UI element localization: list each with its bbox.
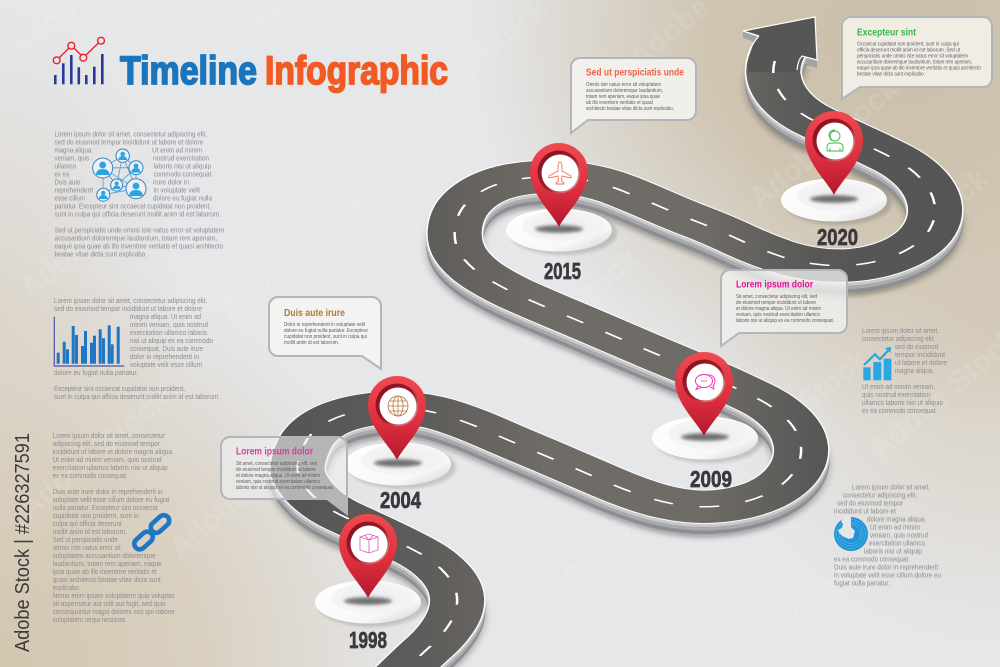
text block: right middle: Ut enim ad minim veniam,: [862, 382, 935, 391]
text block: lower right: incididunt ut labore et: [834, 506, 897, 516]
callout: Lorem ipsum dolor (left): et dolore magna aliqua. Ut enim ad minim: [236, 473, 320, 479]
text block: top left: reprehenderit: [54, 186, 94, 194]
text block: top left: commodo consequat.: [154, 170, 213, 178]
text block: top left: Sed ut perspiciatis unde omnis iste natus error sit voluptatem: [54, 226, 224, 234]
callout: Duis aute irure: mollit anim id est laborum.: [284, 340, 339, 346]
callout: Excepteur sint: Occaecat cupidatat non proident, sunt in culpa qui: [857, 42, 959, 48]
callout: Excepteur sint: eaque ipsa quae ab illo inventore veritatis et quasi architecto: [857, 66, 981, 72]
callout: Duis aute irure: [269, 297, 381, 369]
text block: lower right: sed do eiusmod tempor: [837, 498, 903, 508]
callout: Lorem ipsum dolor (right): laboris nisi ut aliquip ex ea commodo consequat.: [736, 318, 834, 324]
text block: lower right: laboris nisi ut aliquip: [864, 546, 922, 556]
platform and year: 2004: 2004: [380, 487, 421, 513]
text block: right middle: Lorem ipsum dolor sit amet,: [862, 326, 939, 335]
callout: Lorem ipsum dolor (left): laboris nisi ut aliquip ex ea commodo consequat.: [236, 485, 334, 491]
text block: lower right: exercitation ullamco: [869, 538, 925, 548]
text block: top left: accusantium doloremque laudantium, totam rem aperiam,: [54, 234, 217, 242]
callout: Duis aute irure: dolore eu fugiat nulla pariatur. Excepteur: [284, 328, 368, 334]
text block: right middle: [862, 326, 947, 415]
watermark: Adobe Stock: [163, 422, 325, 565]
text block: top left: magna aliqua.: [54, 146, 93, 154]
text block: bottom left: explicabo.: [53, 583, 81, 592]
title: Timeline: [120, 49, 257, 93]
text block: top left: sunt in culpa qui officia deserunt mollit anim id est laborum.: [54, 210, 221, 218]
callout: Sed ut perspiciatis unde: ab illo inventore veritatis et quasi: [586, 100, 653, 106]
text block: top left: beatae vitae dicta sunt explicabo.: [54, 250, 147, 258]
logo icon: chart: [53, 37, 104, 84]
text block: bottom left: voluptate velit esse cillum dolore eu fugiat: [53, 495, 170, 504]
text block: middle left: nisi ut aliquip ex ea commodo: [130, 336, 213, 345]
text block: bottom left: nulla pariatur. Excepteur sint occaecat: [53, 503, 158, 512]
text block: bottom left: voluptatem sequi nesciunt.: [53, 615, 127, 624]
text block: bottom left: laudantium, totam rem aperiam, eaque: [53, 559, 162, 568]
callout: Lorem ipsum dolor (right): [721, 270, 847, 346]
watermark: Adobe Stock: [13, 382, 175, 525]
text block: middle left: consequat. Duis aute irure: [130, 344, 203, 353]
callout: Sed ut perspiciatis unde: accusantium doloremque laudantium,: [586, 88, 663, 94]
callout: Lorem ipsum dolor (left): Sit amet, consectetur adipiscing elit, sed: [236, 461, 317, 467]
text block: middle left: sed do eiusmod tempor incididunt ut labore et dolore: [54, 304, 202, 313]
watermark: Adobe Stock: [753, 512, 915, 655]
watermark: Adobe Stock: [833, 162, 995, 305]
watermark: Adobe Stock: [483, 242, 645, 385]
text block: bottom left: mollit anim id est laborum.: [53, 527, 127, 536]
text block: top left: eaque ipsa quae ab illo inventore veritatis et quasi architecto: [54, 242, 223, 250]
platform and year: 2020: 2020: [817, 224, 858, 250]
text block: bottom left: [53, 431, 175, 624]
callout: Sed ut perspiciatis unde: [571, 58, 696, 133]
icon: people network: [93, 149, 146, 201]
callout: Duis aute irure: Duis aute irure: [284, 307, 345, 319]
platform and year: 2020: [781, 178, 892, 250]
text block: top left: laboris nisi ut aliquip: [154, 162, 211, 170]
callout: Excepteur sint: [842, 17, 992, 99]
text block: lower right: Duis aute irure dolor in reprehenderit: [834, 562, 939, 572]
text block: middle left: [54, 296, 220, 401]
callout: Excepteur sint: officia deserunt mollit anim id est laborum. Sed ut: [857, 48, 960, 54]
callout: Lorem ipsum dolor (left): do eiusmod tempor incididunt ut labore: [236, 467, 316, 473]
text block: top left: nostrud exercitation: [153, 154, 209, 162]
text block: bottom left: Ut enim ad minim veniam, quis nostrud: [53, 455, 162, 464]
text block: top left: ullamco: [54, 162, 76, 170]
text block: middle left: voluptate velit esse cillum: [130, 360, 202, 369]
text block: middle left: exercitation ullamco laboris: [130, 328, 207, 337]
title: Infographic: [265, 49, 448, 93]
platform and year: 2009: 2009: [690, 466, 732, 492]
text block: top left: in voluptate velit: [154, 186, 201, 194]
callout: Lorem ipsum dolor (left): veniam, quis nostrud exercitation ullamco: [236, 479, 320, 485]
callout: Excepteur sint: perspiciatis unde omnis iste natus error sit voluptatem: [857, 54, 968, 60]
watermark: Adobe Stock: [743, 72, 905, 215]
callout: Duis aute irure: cupidatat non proident, sunt in culpa qui: [284, 334, 367, 340]
text block: lower right: dolore magna aliqua.: [867, 514, 926, 524]
text block: top left: Duis aute: [54, 178, 80, 186]
icon: radial chart: [834, 516, 868, 551]
text block: middle left: Excepteur sint occaecat cupidatat non proident,: [54, 384, 185, 393]
icon: bar chart: [54, 317, 124, 366]
text block: middle left: sunt in culpa qui officia deserunt mollit anim id est laborum.: [54, 392, 220, 401]
platform and year: 1998: 1998: [349, 627, 387, 653]
text block: top left: esse cillum: [54, 194, 85, 202]
callout: Sed ut perspiciatis unde: architecto beatae vitae dicta sunt explicabo.: [586, 106, 674, 112]
text block: bottom left: Sed ut perspiciatis unde: [53, 535, 118, 544]
text block: bottom left: consequuntur magni dolores eos qui ratione: [53, 607, 175, 616]
text block: bottom left: Nemo enim ipsam voluptatem quia voluptas: [53, 591, 175, 600]
icon: growth chart: [863, 347, 891, 380]
icon: chain link: [132, 513, 171, 552]
callout: Excepteur sint: beatae vitae dicta sunt explicabo.: [857, 72, 925, 78]
text block: right middle: ullamco laboris nisi ut aliquip: [862, 398, 943, 407]
pin: 2020 headset person icon: [805, 111, 863, 195]
watermark: Adobe Stock: [523, 472, 685, 615]
text block: lower right: in voluptate velit esse cillum dolore eu: [834, 570, 941, 580]
text block: top left: [54, 130, 224, 258]
pin: 2004 globe icon: [368, 376, 426, 460]
callout: Lorem ipsum dolor (right): Lorem ipsum dolor: [736, 278, 813, 290]
text block: bottom left: cupidatat non proident, sunt in: [53, 511, 139, 520]
callout: Excepteur sint: Excepteur sint: [857, 26, 916, 38]
text block: top left: Lorem ipsum dolor sit amet, consectetur adipiscing elit,: [54, 130, 207, 138]
text block: top left: ex ea: [54, 170, 70, 178]
platform and year: 2015: 2015: [544, 258, 581, 284]
text block: top left: irure dolor in: [153, 178, 189, 186]
callout: Excepteur sint: accusantium doloremque laudantium, totam rem aperiam,: [857, 60, 972, 66]
text block: bottom left: ex ea commodo consequat.: [53, 471, 128, 480]
callout: Sed ut perspiciatis unde: Omnis iste natus error sit voluptatem: [586, 82, 661, 88]
text block: top left: sed do eiusmod tempor incididunt ut labore et dolore: [54, 138, 203, 146]
platform and year: 2015: [506, 208, 617, 284]
text block: right middle: ex ea commodo consequat.: [862, 406, 937, 415]
callout: Duis aute irure: Dolor in reprehenderit in voluptate velit: [284, 322, 365, 328]
text block: bottom left: incididunt ut labore et dolore magna aliqua.: [53, 447, 174, 456]
text block: right middle: magna aliqua.: [895, 366, 934, 375]
text block: right middle: tempor incididunt: [895, 350, 946, 359]
text block: middle left: dolore eu fugiat nulla pariatur.: [54, 368, 138, 377]
text block: top left: veniam, quis: [54, 154, 89, 162]
text block: middle left: minim veniam, quis nostrud: [130, 320, 208, 329]
text block: right middle: consectetur adipiscing elit,: [862, 334, 935, 343]
text block: middle left: Lorem ipsum dolor sit amet, consectetur adipiscing elit,: [54, 296, 207, 305]
vertical stock id text: Adobe Stock | #226327591: [12, 433, 34, 652]
text block: middle left: dolor in reprehenderit in: [130, 352, 199, 361]
text block: bottom left: omnis iste natus error sit: [53, 543, 121, 552]
platform and year: 2004: [345, 442, 456, 513]
callout: Lorem ipsum dolor (right): Sit amet, consectetur adipiscing elit, sed: [736, 294, 817, 300]
callout: Lorem ipsum dolor (left): Lorem ipsum dolor: [236, 446, 313, 458]
pin: 2009 chat icon: [675, 352, 733, 436]
text block: top left: pariatur. Excepteur sint occaecat cupidatat non proident,: [54, 202, 211, 210]
text block: bottom left: exercitation ullamco laboris nisi ut aliquip: [53, 463, 168, 472]
callout: Lorem ipsum dolor (right): et dolore magna aliqua. Ut enim ad minim: [736, 306, 821, 312]
title: [120, 49, 448, 93]
text block: right middle: quis nostrud exercitation: [862, 390, 930, 399]
text block: lower right: Lorem ipsum dolor sit amet,: [852, 482, 930, 492]
text block: bottom left: sit aspernatur aut odit aut fugit, sed quia: [53, 599, 166, 608]
text block: lower right: ex ea commodo consequat.: [834, 554, 910, 564]
text block: lower right: consectetur adipiscing elit,: [843, 490, 917, 500]
text block: lower right: [834, 482, 941, 588]
callout: Sed ut perspiciatis unde: Sed ut perspiciatis unde: [586, 66, 684, 78]
text block: lower right: fugiat nulla pariatur.: [834, 578, 890, 588]
text block: bottom left: Lorem ipsum dolor sit amet, consectetur: [53, 431, 165, 440]
callout: Lorem ipsum dolor (left): [221, 437, 347, 514]
pin: 1998 box icon: [339, 514, 397, 598]
text block: bottom left: Duis aute irure dolor in reprehenderit in: [53, 487, 163, 496]
text block: lower right: Ut enim ad minim: [870, 522, 920, 532]
callout: Lorem ipsum dolor (right): do eiusmod tempor incididunt ut labore: [736, 300, 816, 306]
watermark: Adobe Stock: [213, 182, 375, 325]
text block: lower right: veniam, quis nostrud: [870, 530, 928, 540]
text block: bottom left: voluptatem accusantium doloremque: [53, 551, 156, 560]
text block: top left: dolore eu fugiat nulla: [153, 194, 213, 202]
pin: 2015 plane icon: [530, 143, 588, 227]
text block: bottom left: ipsa quae ab illo inventore veritatis et: [53, 567, 157, 576]
callout: Lorem ipsum dolor (right): veniam, quis nostrud exercitation ullamco: [736, 312, 820, 318]
road: [268, 16, 967, 667]
text block: top left: Ut enim ad minim: [152, 146, 202, 154]
callout: Sed ut perspiciatis unde: totam rem aperiam, eaque ipsa quae: [586, 94, 660, 100]
watermark: Adobe Stock: [713, 342, 875, 485]
text block: bottom left: culpa qui officia deserunt: [53, 519, 122, 528]
text block: bottom left: quasi architecto beatae vitae dicta sunt: [53, 575, 161, 584]
text block: right middle: sed do eiusmod: [895, 342, 938, 351]
text block: right middle: ut labore et dolore: [895, 358, 947, 367]
text block: middle left: magna aliqua. Ut enim ad: [130, 312, 201, 321]
platform and year: 2009: [652, 416, 763, 492]
text block: bottom left: adipiscing elit, sed do eiusmod tempor: [53, 439, 160, 448]
watermark: Adobe Stock: [13, 162, 175, 305]
platform and year: 1998: [315, 580, 426, 653]
